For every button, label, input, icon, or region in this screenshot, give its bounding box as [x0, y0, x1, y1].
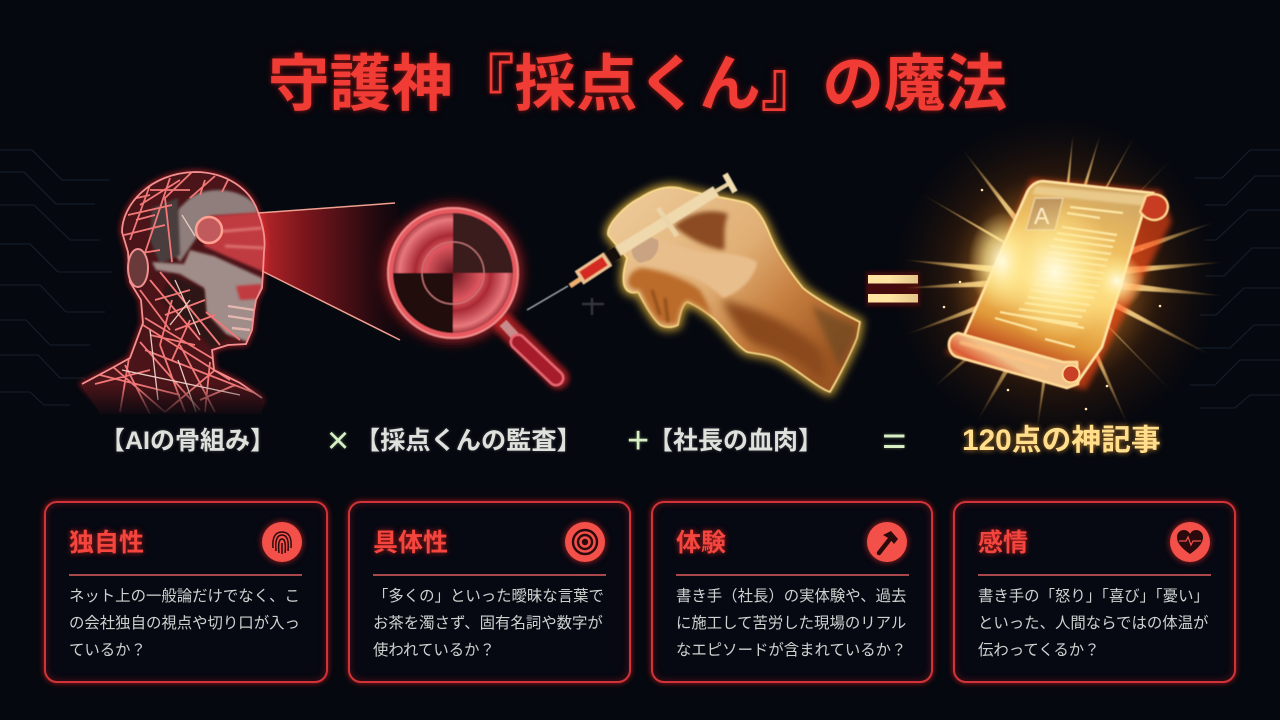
icon: fingerprint [262, 522, 302, 562]
wrist shadow [722, 300, 824, 380]
panel: experience [651, 501, 933, 683]
title: 守護神『採点くん』の魔法 [268, 50, 1007, 119]
operator: plus: + [627, 420, 649, 462]
body text: 書き手の「怒り」「喜び」「憂い」 [978, 588, 1209, 605]
formula label: audit: 【採点くんの監査】 [355, 427, 582, 455]
red face band [204, 212, 268, 272]
red halo [948, 180, 1170, 388]
icon: target [565, 522, 605, 562]
eye ring [196, 217, 222, 243]
palm shadow between thumb and finger [674, 211, 728, 250]
divider [978, 574, 1211, 576]
formula label: president's flesh and blood: 【社長の血肉】 [648, 427, 823, 455]
grey cranium patch [172, 190, 258, 262]
formula label: AI skeleton: 【AIの骨組み】 [100, 427, 275, 455]
mesh strands [95, 172, 260, 414]
body text: ネット上の一般論だけでなく、こ [69, 588, 300, 605]
equals sign [866, 272, 920, 306]
icon: heart with pulse [1170, 522, 1210, 562]
faint plus sign [582, 298, 604, 315]
beam edges [258, 203, 400, 340]
operator: times: × [327, 420, 349, 462]
handle [503, 323, 516, 337]
thumb [632, 237, 757, 298]
scan beam [258, 203, 406, 343]
divider [676, 574, 909, 576]
syringe [527, 174, 735, 310]
grey mid face [152, 250, 266, 342]
heading: 具体性 [373, 529, 448, 557]
body text: 書き手（社長）の実体験や、過去 [676, 588, 906, 605]
body text: といった、人間ならではの体温が [978, 615, 1208, 632]
body text: ているか？ [69, 642, 146, 659]
body text: 「多くの」といった曖昧な言葉で [373, 588, 604, 605]
dust sparks [943, 189, 1161, 410]
scroll paper [962, 181, 1153, 383]
heading: 体験 [676, 529, 726, 557]
body text: 使われているか？ [373, 642, 495, 659]
divider [373, 574, 606, 576]
document text lines [995, 207, 1123, 347]
illustration: hand with syringe [527, 174, 860, 392]
letter A box [1026, 198, 1063, 230]
body text: に施工して苦労した現場のリアル [676, 615, 906, 632]
panel: specificity [348, 501, 631, 683]
heading: 独自性 [69, 529, 144, 557]
lower fingers [628, 268, 712, 324]
circuit pattern background [0, 150, 1280, 408]
panel: uniqueness [44, 501, 328, 683]
body text: なエピソードが含まれているか？ [676, 642, 906, 659]
illustration: magnifying glass [384, 204, 558, 378]
ear [128, 249, 148, 287]
mouth and nose [236, 284, 262, 300]
scroll top band [1032, 186, 1152, 206]
heading: 感情 [978, 529, 1028, 557]
operator: equals: = [882, 417, 907, 464]
formula result: 120点の神記事 [962, 424, 1161, 457]
central shine [993, 200, 1117, 344]
body text: お茶を濁さず、固有名詞や数字が [373, 615, 603, 632]
illustration: AI skeleton head with scan beam [76, 170, 406, 419]
body text: 伝わってくるか？ [978, 642, 1100, 659]
fade at shoulder base [76, 385, 272, 419]
scroll top curl [1140, 194, 1168, 220]
icon: hammer [867, 522, 907, 562]
letter A box: A [1034, 203, 1050, 229]
light rays [905, 135, 1225, 430]
head wireframe [76, 170, 272, 419]
body text: の会社独自の視点や切り口が入っ [69, 615, 300, 632]
divider [69, 574, 302, 576]
panel: emotion [953, 501, 1236, 683]
scroll bottom roll [949, 333, 1078, 388]
illustration: glowing scroll [890, 115, 1225, 445]
